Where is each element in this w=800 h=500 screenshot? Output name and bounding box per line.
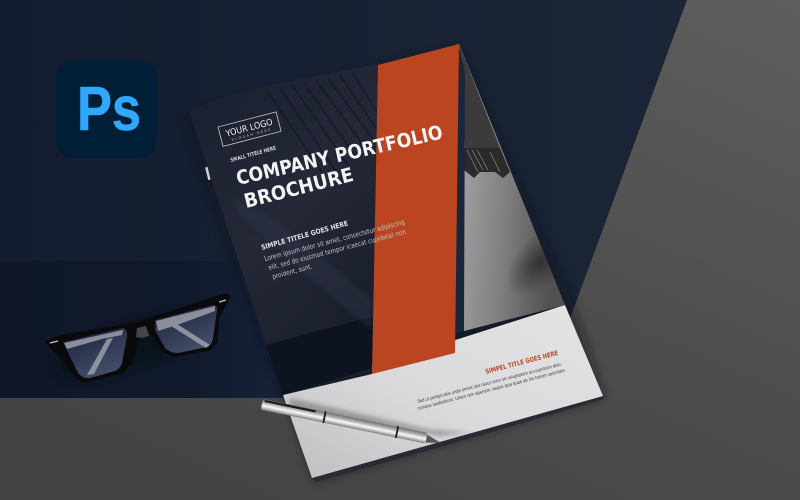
small title: SMALL TITELE HERE bbox=[230, 146, 277, 164]
background: navy panel bbox=[0, 0, 687, 398]
brochure page stack edge bbox=[312, 396, 604, 482]
logo box: YOUR LOGO bbox=[224, 118, 274, 140]
main title: BROCHURE bbox=[242, 163, 356, 213]
cover building lines bbox=[268, 72, 377, 172]
panel: photo page bbox=[455, 44, 565, 334]
panel: orange band bbox=[372, 44, 459, 374]
cover light sweep bbox=[304, 257, 372, 326]
nose bridge bbox=[136, 326, 149, 338]
cover body text: Lorem ipsum dolor sit amet, consectetur adipiscing bbox=[263, 218, 406, 263]
left lens bbox=[63, 328, 127, 378]
right lens bbox=[155, 305, 217, 353]
icon: Photoshop logo: Ps bbox=[77, 75, 141, 144]
brochure bbox=[189, 44, 604, 482]
panel: dark cover bbox=[189, 64, 378, 395]
brochure shadow bbox=[183, 48, 606, 483]
cover body text: proident, sunt. bbox=[271, 263, 313, 281]
cover dark lower band bbox=[266, 316, 373, 395]
icon: Photoshop logo bbox=[56, 60, 157, 158]
lower page body text: rumque laudantium, totam rem aperiam, eaque ipsa quae ab illo tamen veluntate bbox=[417, 368, 566, 412]
lower page body text: Sed ut perspiciatis unde omnis iste natus error sit voluptatem accusantium dolo- bbox=[417, 362, 563, 405]
logo box: SLOGAN HERE bbox=[231, 128, 271, 142]
subtitle: SIMPLE TITELE GOES HERE bbox=[260, 219, 349, 252]
icon: eyeglasses bbox=[46, 294, 230, 392]
panel: white lower page bbox=[283, 305, 603, 478]
main title bbox=[234, 121, 445, 213]
pen bbox=[261, 398, 470, 447]
cover body text: elit, sed do eiusmod tempor icaecat cupidatat non bbox=[267, 228, 407, 272]
lens reflections bbox=[64, 306, 215, 375]
logo box bbox=[218, 112, 281, 146]
lower page title: SIMPEL TITLE GOES HERE bbox=[484, 349, 559, 376]
staple bbox=[205, 167, 211, 180]
temple hinge marks bbox=[50, 341, 58, 343]
main title: COMPANY PORTFOLIO bbox=[234, 121, 445, 190]
cover body text bbox=[263, 218, 407, 281]
